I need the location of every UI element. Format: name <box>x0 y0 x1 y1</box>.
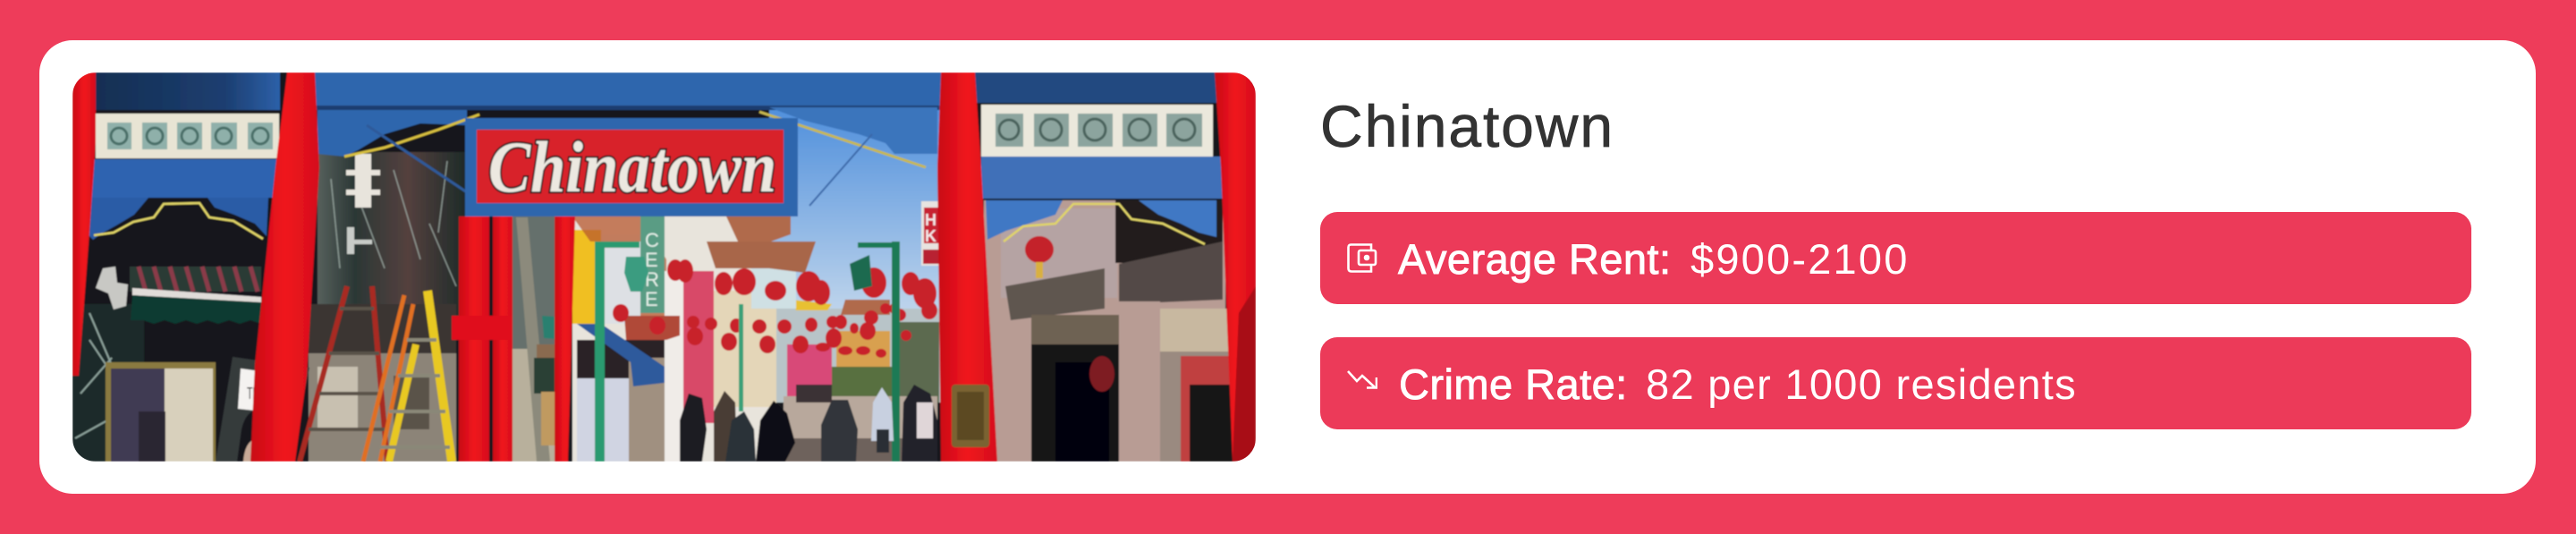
column base and plaque <box>452 286 1256 462</box>
photo: Chinatown gate <box>72 72 1256 462</box>
icon: trending down arrow <box>1347 370 1377 389</box>
street: background shops: R <box>645 268 659 291</box>
left storefront <box>72 267 261 462</box>
street lamp poles: H <box>925 211 936 229</box>
red lanterns <box>613 259 937 358</box>
label: average rent: Average Rent: <box>1398 235 1671 283</box>
pedestrians <box>680 385 937 462</box>
dark marble wall <box>309 152 468 462</box>
street: background shops: C <box>645 229 659 251</box>
sign: Chinatown: Chinatown <box>488 126 776 208</box>
street: background shops: E <box>645 288 658 310</box>
sky <box>769 107 948 322</box>
stat bar: average rent <box>1320 212 2471 304</box>
street lamp poles: K <box>925 227 936 245</box>
value: rent range: $900-2100 <box>1690 235 1910 283</box>
icon: wallet <box>1347 243 1377 273</box>
tissot banner <box>216 357 309 462</box>
man on ladder <box>515 216 556 462</box>
heading: Chinatown: Chinatown <box>1320 93 1614 159</box>
label: crime rate: Crime Rate: <box>1399 360 1628 408</box>
value: crime per 1000: 82 per 1000 residents <box>1646 360 2077 408</box>
stat bar: crime rate <box>1320 337 2471 429</box>
tissot banner: TISSOT <box>247 385 281 403</box>
ladders <box>300 286 452 462</box>
street: background shops: E <box>645 249 658 271</box>
blue beams and brackets <box>83 72 1223 244</box>
red columns <box>72 72 1256 462</box>
lattice panels <box>96 105 1213 158</box>
right building <box>984 200 1235 462</box>
street lamp poles <box>595 201 939 462</box>
street: background shops <box>513 216 946 462</box>
